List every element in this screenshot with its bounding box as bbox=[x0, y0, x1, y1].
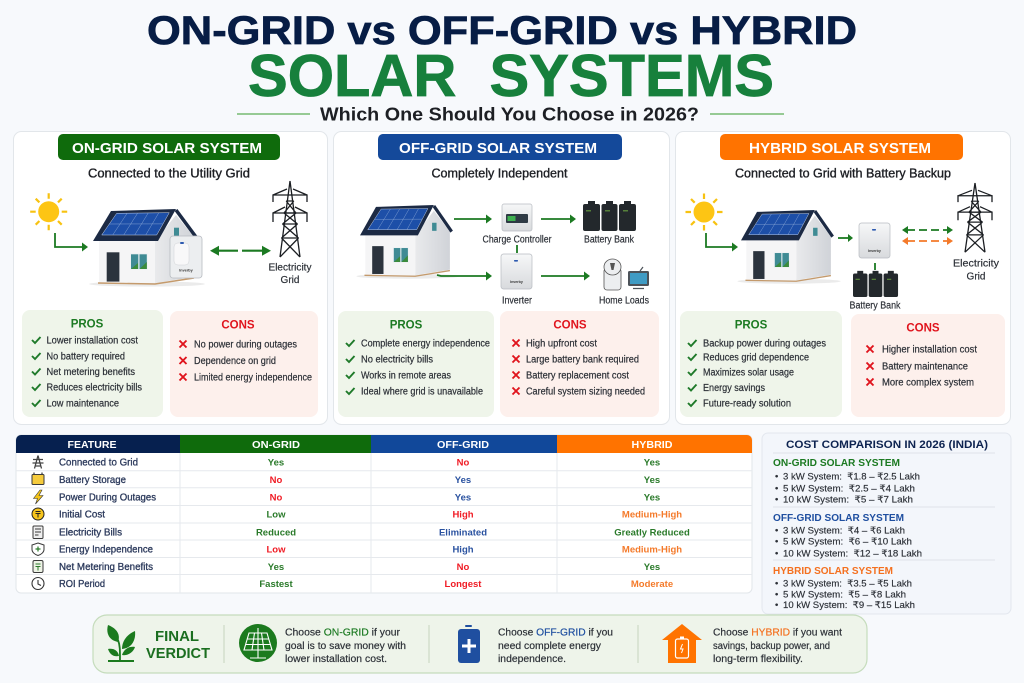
off-grid costs: 3 kW System: ₹4 – ₹6 Lakh bbox=[783, 526, 905, 536]
final verdict heading: VERDICT bbox=[146, 645, 210, 662]
panel: on-grid bbox=[14, 132, 328, 424]
pros: off-grid: Ideal where grid is unavailable bbox=[361, 386, 483, 398]
title: Which One Should You Choose in 2026? bbox=[320, 104, 699, 124]
hybrid column values: Yes bbox=[644, 458, 660, 468]
verdict: on-grid: goal is to save money with bbox=[285, 641, 406, 652]
off-grid costs: • bbox=[775, 548, 778, 560]
hybrid costs: HYBRID SOLAR SYSTEM bbox=[773, 565, 893, 577]
pros: off-grid: Works in remote areas bbox=[361, 370, 451, 382]
off-grid column values: Yes bbox=[455, 492, 471, 504]
pros: on-grid: Lower installation cost bbox=[46, 336, 138, 346]
comparison table bbox=[16, 435, 752, 593]
subtitle: Connected to the Utility Grid bbox=[88, 166, 250, 180]
icon: battery bank bbox=[583, 201, 636, 231]
pros: hybrid: Backup power during outages bbox=[703, 338, 826, 350]
icon: house with solar panels bbox=[737, 210, 841, 284]
hybrid column values bbox=[614, 458, 690, 590]
cons: off-grid: Battery replacement cost bbox=[526, 370, 629, 382]
subtitle: Completely Independent bbox=[432, 166, 568, 180]
icon: charge controller bbox=[502, 204, 532, 231]
table header bbox=[16, 435, 752, 453]
icon: house with solar panels bbox=[356, 205, 460, 279]
hybrid column values: Medium-High bbox=[622, 510, 682, 520]
cons: on-grid: CONS bbox=[221, 320, 255, 332]
hybrid column values: Medium-High bbox=[622, 544, 682, 556]
off-grid costs: OFF-GRID SOLAR SYSTEM bbox=[773, 512, 904, 524]
heading: on-grid banner bbox=[58, 134, 280, 160]
icon: pylon bbox=[273, 181, 307, 257]
arrow: sun to house bbox=[55, 233, 88, 252]
on-grid costs: • bbox=[775, 472, 778, 482]
on-grid column values: Yes bbox=[268, 458, 284, 468]
icon: solar panel badge bbox=[239, 624, 277, 662]
label: battery bank: Battery Bank bbox=[850, 300, 901, 312]
icon: inverter bbox=[501, 254, 532, 289]
verdict: hybrid bbox=[713, 628, 842, 665]
pros: hybrid bbox=[680, 311, 842, 417]
label: electricity grid: Electricity bbox=[953, 258, 999, 270]
pros: off-grid: No electricity bills bbox=[361, 354, 433, 366]
hybrid costs: • bbox=[775, 578, 778, 590]
final verdict heading: FINAL bbox=[155, 628, 199, 645]
row labels: Power During Outages bbox=[59, 492, 156, 504]
panel: hybrid bbox=[676, 132, 1010, 424]
hybrid costs: 5 kW System: ₹5 – ₹8 Lakh bbox=[783, 590, 906, 600]
off-grid column values: Longest bbox=[445, 579, 482, 590]
pros: on-grid bbox=[22, 310, 163, 417]
cons: hybrid: Higher installation cost bbox=[882, 344, 977, 356]
heading: hybrid banner bbox=[720, 134, 963, 160]
label: electricity grid: Electricity bbox=[268, 262, 312, 274]
hybrid column values: Yes bbox=[644, 475, 660, 486]
pros: off-grid: PROS bbox=[390, 320, 423, 332]
row labels: Connected to Grid bbox=[59, 456, 138, 468]
hybrid costs: 10 kW System: ₹9 – ₹15 Lakh bbox=[783, 600, 915, 611]
heading: off-grid banner bbox=[378, 134, 622, 160]
subtitle: Connected to Grid with Battery Backup bbox=[735, 166, 951, 180]
icon: home loads bbox=[604, 259, 649, 290]
pros: hybrid: Maximizes solar usage bbox=[703, 368, 794, 378]
hybrid column values: Greatly Reduced bbox=[614, 528, 690, 538]
icon: sun bbox=[686, 194, 722, 230]
cons: hybrid: More complex system bbox=[882, 378, 974, 388]
title: ON-GRID vs OFF-GRID vs HYBRID bbox=[147, 9, 857, 53]
cons: hybrid: Battery maintenance bbox=[882, 362, 968, 372]
hybrid costs: • bbox=[775, 590, 778, 600]
on-grid costs: 5 kW System: ₹2.5 – ₹4 Lakh bbox=[783, 484, 915, 494]
cons: on-grid: No power during outages bbox=[194, 340, 297, 350]
on-grid costs: • bbox=[775, 494, 778, 506]
heading: hybrid banner: HYBRID SOLAR SYSTEM bbox=[749, 140, 931, 157]
on-grid column values: Low bbox=[266, 510, 286, 520]
label: electricity grid: Grid bbox=[281, 275, 299, 286]
pros: on-grid: Low maintenance bbox=[46, 398, 119, 410]
label: electricity grid bbox=[268, 262, 312, 286]
pros: off-grid: Complete energy independence bbox=[361, 338, 490, 350]
on-grid costs: 10 kW System: ₹5 – ₹7 Lakh bbox=[783, 494, 913, 506]
pros: on-grid: Reduces electricity bills bbox=[46, 382, 142, 394]
cons: off-grid: Large battery bank required bbox=[526, 354, 639, 366]
icon: house with solar panels bbox=[89, 209, 205, 287]
verdict: on-grid: Choose ON-GRID if your bbox=[285, 628, 401, 638]
cons: hybrid bbox=[851, 314, 1005, 417]
icon: battery bank bbox=[853, 263, 898, 297]
pros: hybrid: Reduces grid dependence bbox=[703, 352, 809, 364]
on-grid column values: Reduced bbox=[256, 528, 296, 538]
cons: on-grid: Limited energy independence bbox=[194, 372, 312, 384]
off-grid column values: No bbox=[457, 562, 470, 573]
cons: off-grid bbox=[500, 311, 659, 417]
pros: on-grid: No battery required bbox=[46, 352, 125, 362]
icon: sun bbox=[30, 193, 67, 230]
arrow: sun to house bbox=[706, 233, 738, 252]
icon: battery bbox=[458, 625, 480, 663]
off-grid column values bbox=[439, 458, 487, 590]
arrow: inverter to grid, two way bbox=[210, 246, 271, 256]
verdict: on-grid bbox=[285, 628, 406, 665]
table header: OFF-GRID bbox=[437, 439, 489, 451]
hybrid column values: Yes bbox=[644, 492, 660, 504]
off-grid costs: • bbox=[775, 526, 778, 536]
cons: off-grid: Careful system sizing needed bbox=[526, 386, 645, 398]
table header: HYBRID bbox=[632, 439, 673, 451]
off-grid costs: 5 kW System: ₹6 – ₹10 Lakh bbox=[783, 536, 912, 548]
icon: orange house with battery bbox=[662, 624, 702, 663]
cons: off-grid: High upfront cost bbox=[526, 338, 597, 350]
on-grid column values: No bbox=[270, 475, 283, 486]
off-grid costs bbox=[773, 512, 922, 560]
on-grid column values: Yes bbox=[268, 562, 284, 573]
cons: off-grid: CONS bbox=[553, 320, 587, 332]
row icons bbox=[32, 456, 44, 590]
verdict: off-grid bbox=[498, 628, 613, 665]
panel: cost comparison bbox=[762, 433, 1011, 614]
cons: on-grid bbox=[170, 311, 318, 417]
on-grid column values: No bbox=[270, 492, 283, 504]
hybrid costs: • bbox=[775, 600, 778, 611]
on-grid column values: Fastest bbox=[259, 579, 293, 590]
pros: off-grid bbox=[338, 311, 494, 417]
label: inverter: Inverter bbox=[502, 296, 533, 306]
icon: pylon bbox=[958, 183, 992, 252]
verdict: off-grid: need complete energy bbox=[498, 641, 601, 652]
on-grid column values: Low bbox=[266, 544, 286, 556]
hybrid column values: Yes bbox=[644, 562, 660, 573]
verdict: off-grid: independence. bbox=[498, 654, 566, 665]
hybrid column values: Moderate bbox=[631, 579, 673, 590]
label: battery bank: Battery Bank bbox=[584, 234, 635, 246]
row labels bbox=[59, 456, 156, 590]
row labels: ROI Period bbox=[59, 578, 105, 590]
title bbox=[147, 9, 857, 124]
label: electricity grid bbox=[953, 258, 999, 282]
icon: inverter bbox=[859, 223, 890, 258]
label: home loads: Home Loads bbox=[599, 296, 649, 306]
table header: ON-GRID bbox=[252, 439, 300, 451]
cons: on-grid: Dependence on grid bbox=[194, 356, 276, 367]
off-grid column values: No bbox=[457, 458, 470, 468]
off-grid column values: High bbox=[452, 510, 474, 520]
verdict: on-grid: lower installation cost. bbox=[285, 654, 387, 665]
off-grid column values: Yes bbox=[455, 475, 471, 486]
off-grid costs: • bbox=[775, 536, 778, 548]
label: charge controller: Charge Controller bbox=[482, 234, 552, 246]
heading: off-grid banner: OFF-GRID SOLAR SYSTEM bbox=[399, 140, 597, 157]
pros: on-grid: PROS bbox=[71, 318, 104, 330]
icon: inverter bbox=[170, 236, 202, 278]
arrows: dashed two way flows bbox=[902, 226, 953, 245]
off-grid column values: High bbox=[452, 544, 474, 556]
on-grid column values bbox=[256, 458, 296, 590]
on-grid costs: 3 kW System: ₹1.8 – ₹2.5 Lakh bbox=[783, 472, 920, 482]
off-grid column values: Eliminated bbox=[439, 528, 487, 538]
verdict: hybrid: long-term flexibility. bbox=[713, 654, 803, 665]
title: SOLAR SYSTEMS bbox=[248, 43, 774, 109]
label: electricity grid: Grid bbox=[967, 272, 985, 282]
icon: plant bbox=[107, 625, 135, 661]
pros: on-grid: Net metering benefits bbox=[46, 367, 135, 378]
hybrid costs: 3 kW System: ₹3.5 – ₹5 Lakh bbox=[783, 578, 912, 590]
row labels: Initial Cost bbox=[59, 508, 105, 520]
table header: FEATURE bbox=[68, 439, 116, 451]
on-grid costs bbox=[773, 457, 920, 506]
final verdict bar bbox=[93, 615, 867, 673]
off-grid costs: 10 kW System: ₹12 – ₹18 Lakh bbox=[783, 548, 922, 560]
row labels: Battery Storage bbox=[59, 474, 126, 486]
cost heading: COST COMPARISON IN 2026 (INDIA) bbox=[786, 439, 988, 451]
row labels: Energy Independence bbox=[59, 544, 153, 556]
on-grid costs: ON-GRID SOLAR SYSTEM bbox=[773, 457, 900, 469]
arrow: house to inverter bbox=[838, 234, 853, 242]
panel: off-grid bbox=[334, 132, 670, 424]
icon: inverter: Inverby bbox=[179, 268, 194, 272]
hybrid costs bbox=[773, 565, 915, 611]
verdict: off-grid: Choose OFF-GRID if you bbox=[498, 628, 613, 638]
pros: hybrid: Future-ready solution bbox=[703, 398, 791, 410]
row labels: Electricity Bills bbox=[59, 526, 122, 538]
pros: hybrid: PROS bbox=[735, 320, 768, 332]
arrows: off-grid flow bbox=[437, 214, 590, 280]
verdict: hybrid: savings, backup power, and bbox=[713, 641, 830, 652]
verdict: hybrid: Choose HYBRID if you want bbox=[713, 628, 842, 638]
heading: on-grid banner: ON-GRID SOLAR SYSTEM bbox=[72, 140, 262, 157]
on-grid costs: • bbox=[775, 484, 778, 494]
cons: hybrid: CONS bbox=[906, 322, 940, 334]
final verdict heading bbox=[146, 628, 210, 662]
pros: hybrid: Energy savings bbox=[703, 383, 765, 394]
row labels: Net Metering Benefits bbox=[59, 561, 153, 573]
